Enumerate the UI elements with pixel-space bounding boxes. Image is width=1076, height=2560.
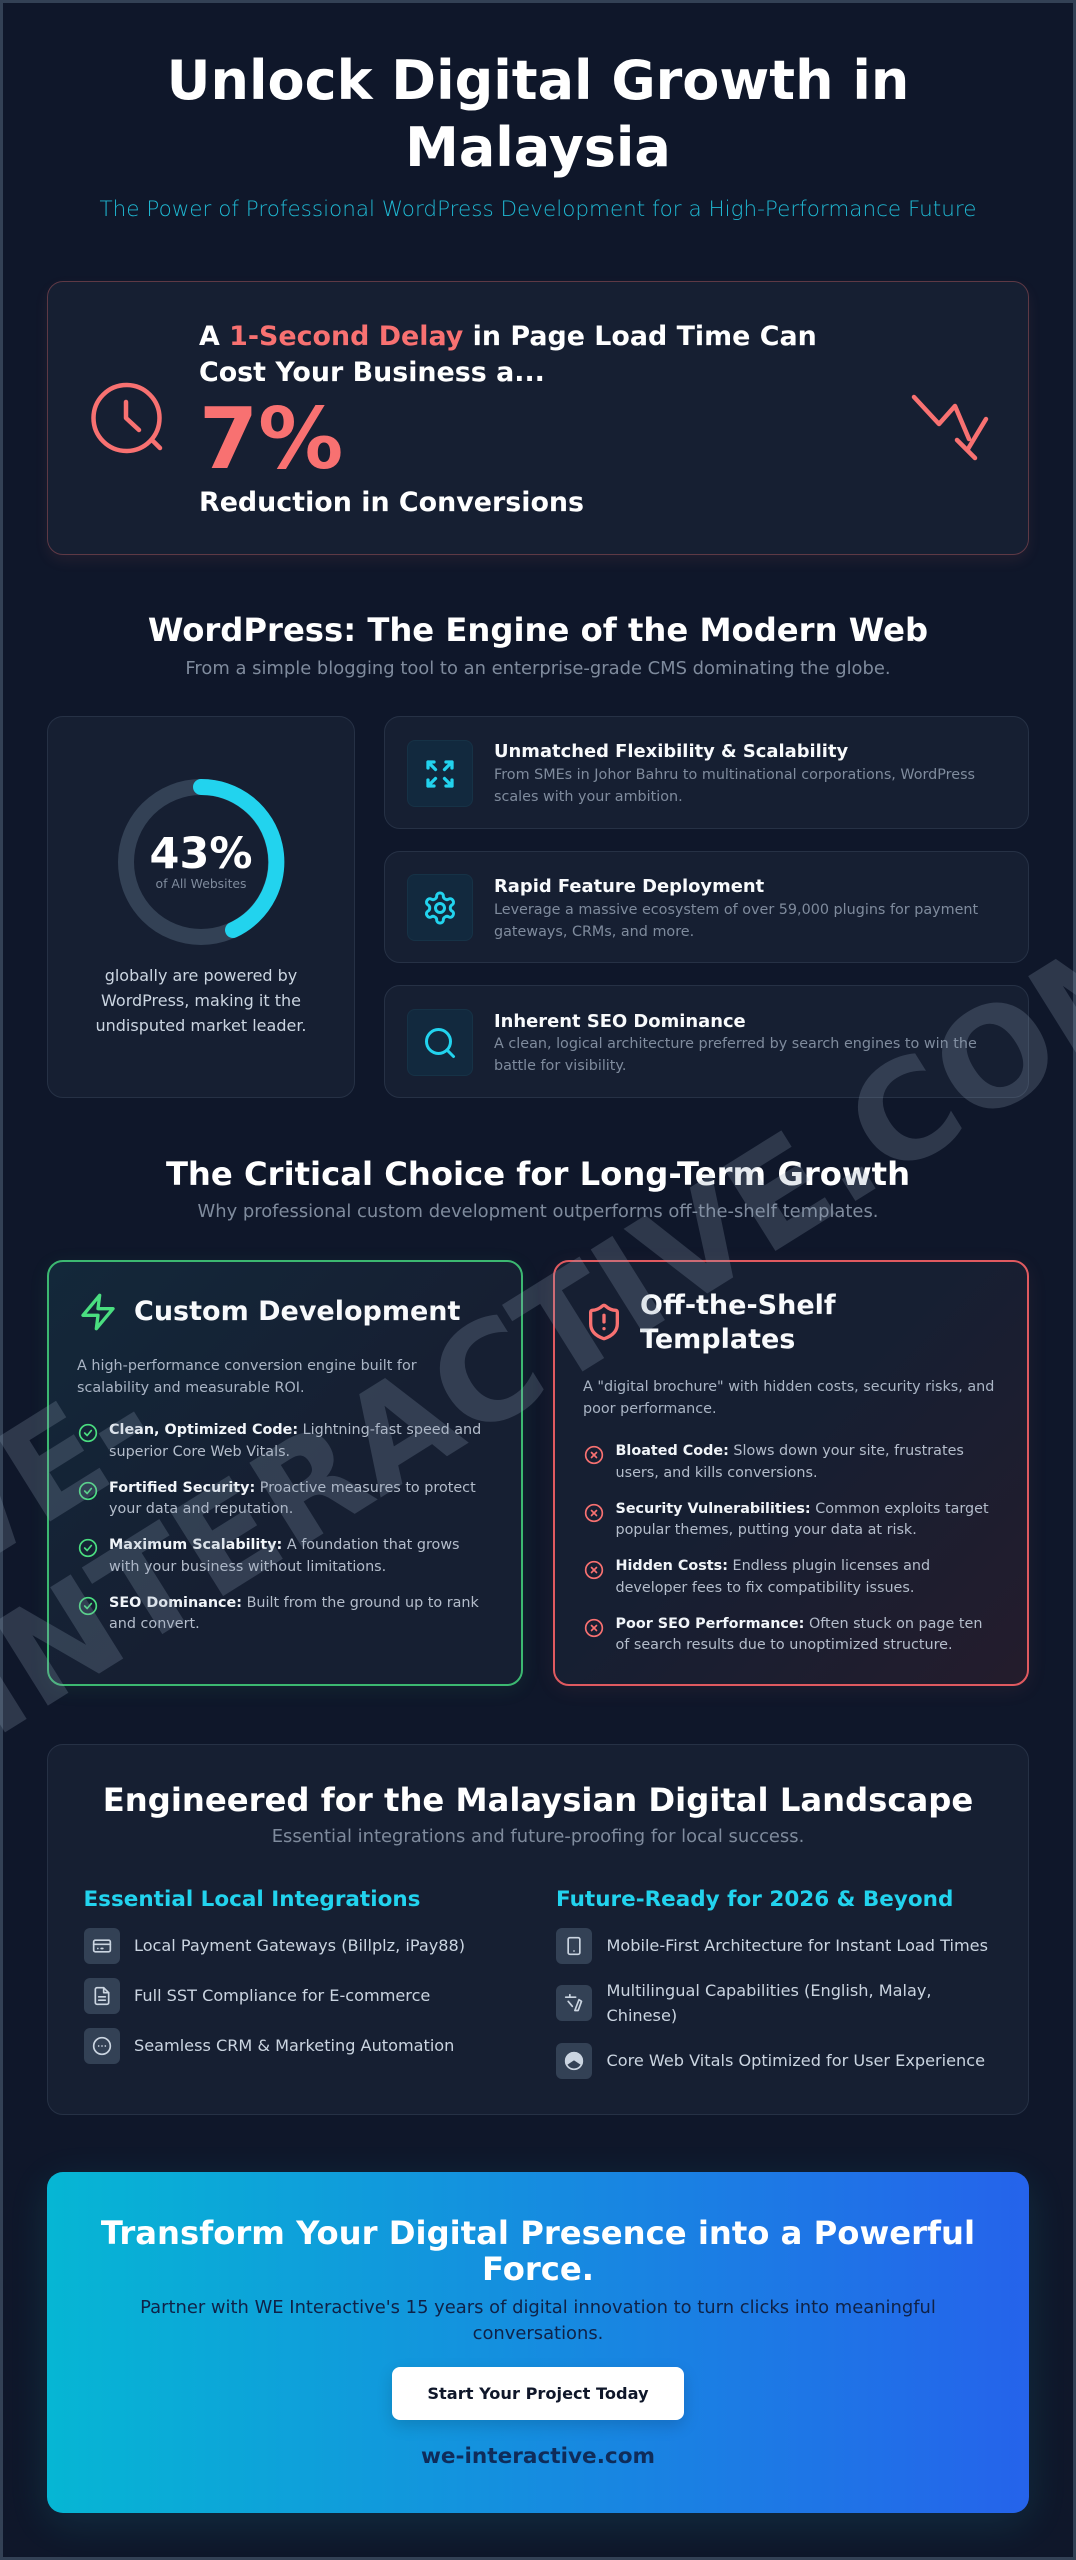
delay headline [199, 321, 817, 388]
website link: we-interactive.com [421, 2444, 655, 2469]
feature description [494, 902, 978, 940]
feature description: scales with your ambition. [494, 789, 683, 805]
title [167, 49, 909, 179]
feature description [494, 767, 975, 805]
drawback item: popular themes, putting your data at risk. [616, 1522, 917, 1538]
subheading: WordPress section: From a simple blogging tool to an enterprise-grade CMS dominating the globe. [185, 658, 891, 679]
panel: market share [47, 716, 355, 1098]
panel: off-the-shelf templates [553, 1260, 1029, 1686]
CTA heading [101, 2214, 975, 2288]
delay headline: A 1-Second Delay in Page Load Time Can [199, 321, 817, 352]
benefit item [78, 1594, 479, 1632]
CTA heading: Transform Your Digital Presence into a Powerful [101, 2214, 975, 2252]
panel: rapid deployment [384, 851, 1029, 963]
drawback item: of search results due to unoptimized structure. [616, 1637, 953, 1653]
section subheading: Essential integrations and future-proofing for local success. [272, 1826, 804, 1847]
title: Unlock Digital Growth in [167, 49, 909, 112]
drawback item [584, 1616, 982, 1653]
donut caption: of All Websites [155, 876, 247, 891]
CTA button: Start Your Project Today [427, 2384, 649, 2403]
panel: SEO [384, 985, 1029, 1098]
drawback item: Security Vulnerabilities: Common exploits target [616, 1500, 989, 1516]
card title: Templates [640, 1324, 795, 1355]
column heading: local integrations: Essential Local Integrations [84, 1887, 420, 1912]
card description: scalability and measurable ROI. [77, 1380, 305, 1396]
icon: expand arrows [407, 740, 473, 807]
drawback item: users, and kills conversions. [616, 1465, 818, 1481]
icon: gear [407, 874, 473, 941]
heading: WordPress section: WordPress: The Engine of the Modern Web [148, 611, 928, 649]
icon: lightning [81, 1294, 115, 1330]
stat caption: Reduction in Conversions [199, 487, 584, 518]
title: Malaysia [405, 116, 671, 179]
card description [583, 1379, 994, 1417]
feature description [494, 1036, 977, 1074]
drawback item [584, 1558, 930, 1596]
benefit item: Clean, Optimized Code: Lightning-fast speed and [109, 1422, 481, 1438]
subtitle: The Power of Professional WordPress Development for a High-Performance Future [100, 197, 976, 222]
icon: clock [91, 382, 162, 454]
drawback item: Poor SEO Performance: Often stuck on page ten [616, 1616, 982, 1632]
future-ready text [606, 1981, 932, 2025]
feature description: A clean, logical architecture preferred by search engines to win the [494, 1036, 977, 1052]
future-ready text: Core Web Vitals Optimized for User Experience [606, 2051, 985, 2070]
card description: poor performance. [583, 1401, 717, 1417]
panel: page load delay stat [47, 281, 1029, 555]
card title: Custom Development [134, 1296, 460, 1327]
panel: Malaysian digital landscape [47, 1744, 1029, 2115]
icon: trending down [912, 394, 988, 460]
feature description: Leverage a massive ecosystem of over 59,000 plugins for payment [494, 902, 978, 918]
feature title: Inherent SEO Dominance [494, 1011, 746, 1032]
benefit item: Maximum Scalability: A foundation that grows [109, 1537, 460, 1553]
panel: flexibility [384, 716, 1029, 829]
benefit item: superior Core Web Vitals. [109, 1444, 290, 1460]
drawback item: Hidden Costs: Endless plugin licenses and [616, 1558, 930, 1574]
feature description: gateways, CRMs, and more. [494, 924, 694, 940]
market share text: WordPress, making it the [101, 991, 301, 1010]
heading: critical choice: The Critical Choice for Long-Term Growth [166, 1155, 910, 1193]
donut chart: 43 percent [118, 779, 284, 945]
subheading: critical choice: Why professional custom development outperforms off-the-shelf templates. [198, 1201, 878, 1222]
CTA description: conversations. [473, 2323, 603, 2344]
card description: A "digital brochure" with hidden costs, security risks, and [583, 1379, 994, 1395]
drawback item [584, 1500, 989, 1538]
future-ready text: Chinese) [606, 2006, 677, 2025]
panel: call to action [47, 2172, 1029, 2513]
icon: shield alert [589, 1304, 619, 1340]
delay headline: Cost Your Business a... [199, 357, 545, 388]
market share text: undisputed market leader. [95, 1016, 307, 1035]
section heading: Engineered for the Malaysian Digital Landscape [103, 1781, 973, 1819]
icon: credit card [84, 1928, 120, 1964]
benefit item [78, 1480, 476, 1517]
benefit item: with your business without limitations. [109, 1559, 386, 1575]
feature title: Rapid Feature Deployment [494, 876, 764, 897]
CTA description [140, 2297, 936, 2344]
integration text: Seamless CRM & Marketing Automation [134, 2036, 454, 2055]
benefit item: SEO Dominance: Built from the ground up to rank [109, 1594, 479, 1610]
drawback item: developer fees to fix compatibility issues. [616, 1580, 914, 1596]
feature description: From SMEs in Johor Bahru to multinational corporations, WordPress [494, 767, 975, 783]
benefit item: Fortified Security: Proactive measures to protect [109, 1480, 476, 1496]
donut value: 43% [150, 829, 252, 879]
integration text: Local Payment Gateways (Billplz, iPay88) [134, 1936, 465, 1955]
card title: Off-the-Shelf [640, 1290, 836, 1321]
icon: pie gauge [556, 2043, 592, 2079]
icon: smartphone [556, 1928, 592, 1964]
column heading: future ready: Future-Ready for 2026 & Beyond [556, 1887, 953, 1912]
market share text: globally are powered by [105, 966, 297, 985]
icon: languages [556, 1985, 592, 2021]
icon: search [407, 1009, 473, 1076]
future-ready text: Mobile-First Architecture for Instant Load Times [606, 1936, 988, 1955]
integration text: Full SST Compliance for E-commerce [134, 1986, 430, 2005]
drawback item [584, 1443, 964, 1481]
CTA description: Partner with WE Interactive's 15 years of digital innovation to turn clicks into meaningful [140, 2297, 936, 2318]
benefit item: your data and reputation. [109, 1501, 293, 1517]
stat: 7 percent: 7% [199, 390, 343, 489]
future-ready text: Multilingual Capabilities (English, Malay, [606, 1981, 932, 2000]
panel: custom development [47, 1260, 523, 1686]
CTA heading: Force. [482, 2250, 594, 2288]
card description: A high-performance conversion engine built for [77, 1358, 417, 1374]
market share text [95, 966, 307, 1035]
drawback item: Bloated Code: Slows down your site, frustrates [616, 1443, 964, 1459]
icon: file [84, 1978, 120, 2014]
benefit item [78, 1422, 481, 1460]
feature description: battle for visibility. [494, 1058, 626, 1074]
icon: message dots [84, 2028, 120, 2064]
feature title: Unmatched Flexibility & Scalability [494, 741, 848, 762]
card description [77, 1358, 417, 1396]
card title [640, 1290, 836, 1355]
benefit item: and convert. [109, 1616, 200, 1632]
benefit item [78, 1537, 460, 1575]
CTA button [392, 2367, 684, 2420]
